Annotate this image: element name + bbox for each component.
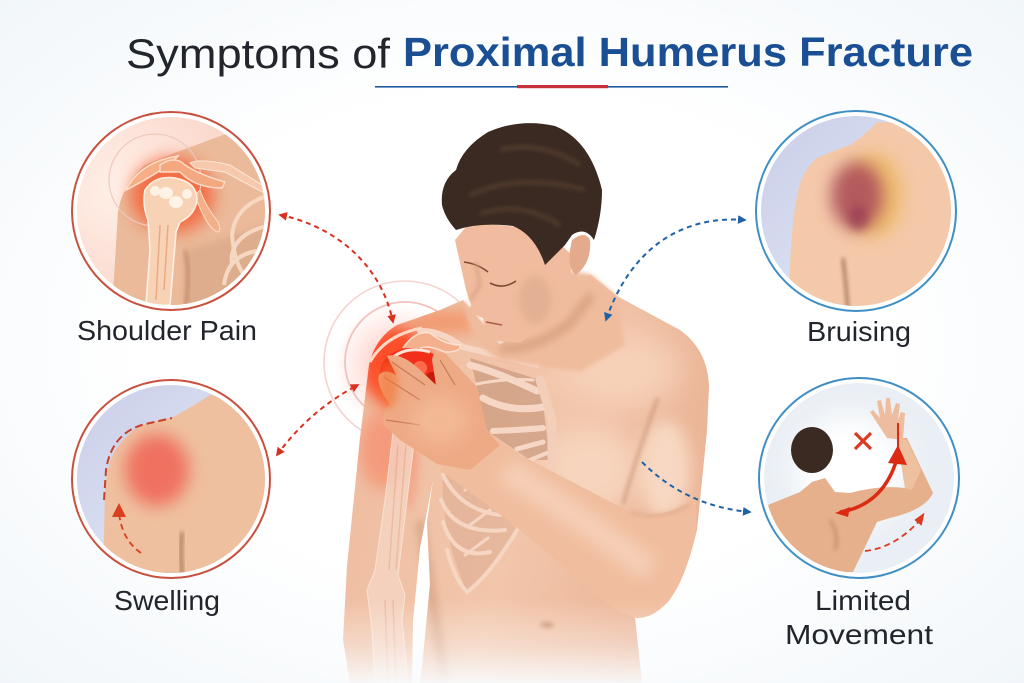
face — [455, 222, 590, 343]
neck — [463, 270, 625, 372]
label: limited movement: Limited — [815, 585, 911, 616]
arrow: shoulder pain — [280, 215, 393, 322]
hand — [378, 352, 500, 470]
label: limited movement: Movement — [785, 619, 933, 650]
label: shoulder pain: Shoulder Pain — [77, 315, 257, 346]
back and raised arm — [768, 438, 933, 572]
forearm — [440, 428, 697, 618]
label: limited movement — [785, 585, 933, 650]
panel: limited movement — [759, 378, 959, 578]
fractured shoulder bone — [369, 326, 460, 385]
label: bruising: Bruising — [807, 316, 911, 347]
panel: bruising — [755, 110, 960, 315]
scapula and clavicle — [126, 156, 270, 305]
humerus bone — [367, 430, 418, 683]
title: Symptoms of — [126, 30, 390, 77]
torso and arms — [343, 274, 709, 683]
title underline — [375, 85, 728, 88]
arrow: bruising — [606, 220, 745, 320]
central figure — [324, 123, 709, 683]
cross mark — [855, 433, 871, 449]
rib cage lower — [441, 475, 517, 592]
panel: swelling — [70, 380, 270, 580]
title — [126, 29, 973, 77]
rib cage upper — [420, 331, 552, 475]
title: Proximal Humerus Fracture — [403, 29, 973, 75]
arrow: limited movement — [642, 462, 750, 512]
red motion arrow — [840, 464, 898, 512]
panel: shoulder pain — [70, 110, 270, 310]
label: swelling: Swelling — [114, 585, 220, 616]
dashed movement arrow — [865, 519, 921, 551]
pain rings around shoulder — [323, 280, 460, 431]
rib window — [470, 358, 550, 460]
hair — [442, 123, 602, 265]
arrow: swelling — [277, 385, 358, 455]
